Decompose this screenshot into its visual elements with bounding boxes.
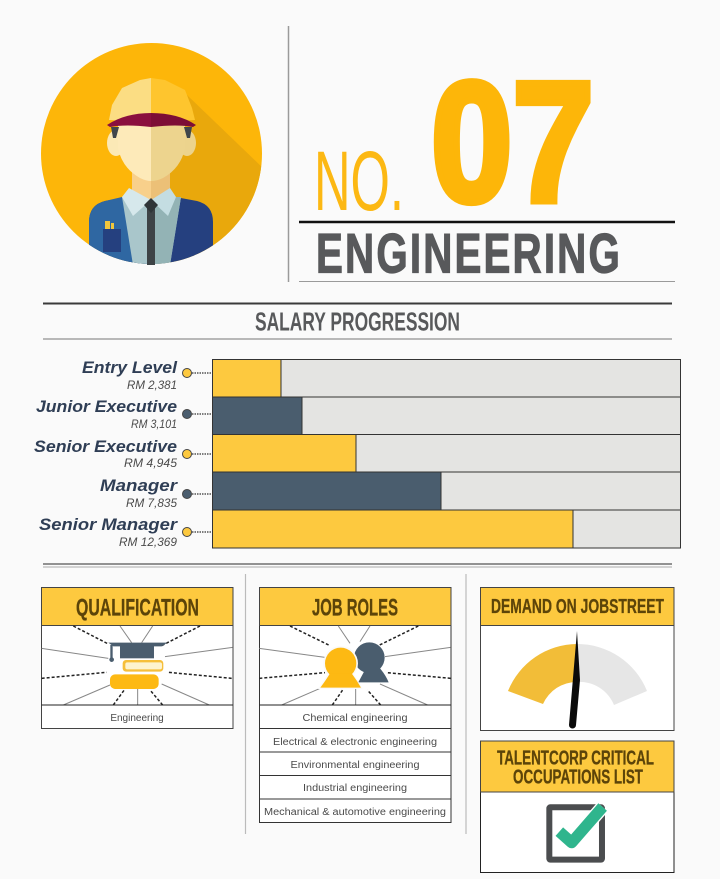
- rule: title bottom: [299, 280, 675, 282]
- label: junior executive: RM 3,101: [131, 417, 177, 431]
- text: engineering: Engineering: [110, 713, 164, 724]
- panel: qualification: [42, 588, 233, 728]
- divider: header vertical rule: [288, 26, 290, 282]
- rays: job roles: [259, 626, 451, 705]
- rule: title top: [299, 221, 675, 223]
- label: senior manager: RM 12,369: [119, 535, 177, 549]
- label: senior manager: [39, 515, 212, 549]
- label: senior manager: Senior Manager: [39, 515, 178, 534]
- bar: senior manager: [212, 510, 680, 548]
- bar: senior executive: [212, 434, 680, 472]
- list: roles: Industrial engineering: [303, 783, 407, 794]
- panel: job roles: [259, 588, 451, 822]
- text: 07: 07: [431, 47, 594, 238]
- list: roles: [260, 705, 451, 818]
- list: roles: Mechanical & automotive engineering: [264, 807, 446, 818]
- bar: entry level: [212, 360, 680, 397]
- text: NO.: NO.: [314, 134, 404, 228]
- labels: salary levels: [34, 358, 212, 549]
- icon: graduation cap and books: [108, 643, 167, 689]
- header: talentcorp: OCCUPATIONS LIST: [513, 766, 643, 788]
- bar: junior executive: [212, 397, 680, 434]
- rule: salary bottom: [43, 338, 672, 340]
- icon: engineer avatar: [41, 43, 265, 265]
- icon: two people: [318, 642, 389, 689]
- list: roles: Chemical engineering: [302, 713, 408, 724]
- bar: manager: [212, 472, 680, 510]
- label: junior executive: Junior Executive: [36, 397, 177, 416]
- divider: column right: [465, 574, 467, 834]
- header: job roles: JOB ROLES: [312, 594, 398, 622]
- divider row: [42, 704, 233, 706]
- label: junior executive: [36, 397, 212, 431]
- icon: check mark: [549, 807, 603, 860]
- label: manager: Manager: [100, 476, 179, 495]
- heading: salary progression: SALARY PROGRESSION: [255, 306, 460, 336]
- heading: ENGINEERING: ENGINEERING: [316, 223, 622, 285]
- header: qualification: QUALIFICATION: [76, 594, 199, 622]
- header: talentcorp: [480, 741, 674, 792]
- rays: qualification: [42, 626, 233, 705]
- list: roles: Electrical & electronic engineering: [273, 737, 437, 748]
- header: demand: [480, 588, 674, 626]
- header: qualification: [42, 588, 233, 626]
- label: manager: [100, 476, 212, 510]
- panel: demand on jobstreet: [480, 588, 674, 730]
- header: job roles: [260, 588, 451, 626]
- label: senior executive: Senior Executive: [34, 437, 177, 456]
- label: senior executive: RM 4,945: [124, 456, 177, 470]
- panel: talentcorp critical occupations list: [480, 741, 674, 872]
- list: roles: Environmental engineering: [290, 760, 420, 771]
- label: entry level: Entry Level: [82, 358, 178, 377]
- rule: salary top: [43, 302, 672, 304]
- bar chart: salary progression: [212, 360, 680, 548]
- divider: double rule: [43, 564, 672, 567]
- chart: gauge: [508, 631, 647, 729]
- label: senior executive: [34, 437, 212, 470]
- label: entry level: [82, 358, 212, 392]
- label: entry level: RM 2,381: [127, 378, 177, 392]
- divider: column left: [244, 574, 246, 834]
- title: rank number: [314, 47, 594, 238]
- label: manager: RM 7,835: [126, 496, 177, 510]
